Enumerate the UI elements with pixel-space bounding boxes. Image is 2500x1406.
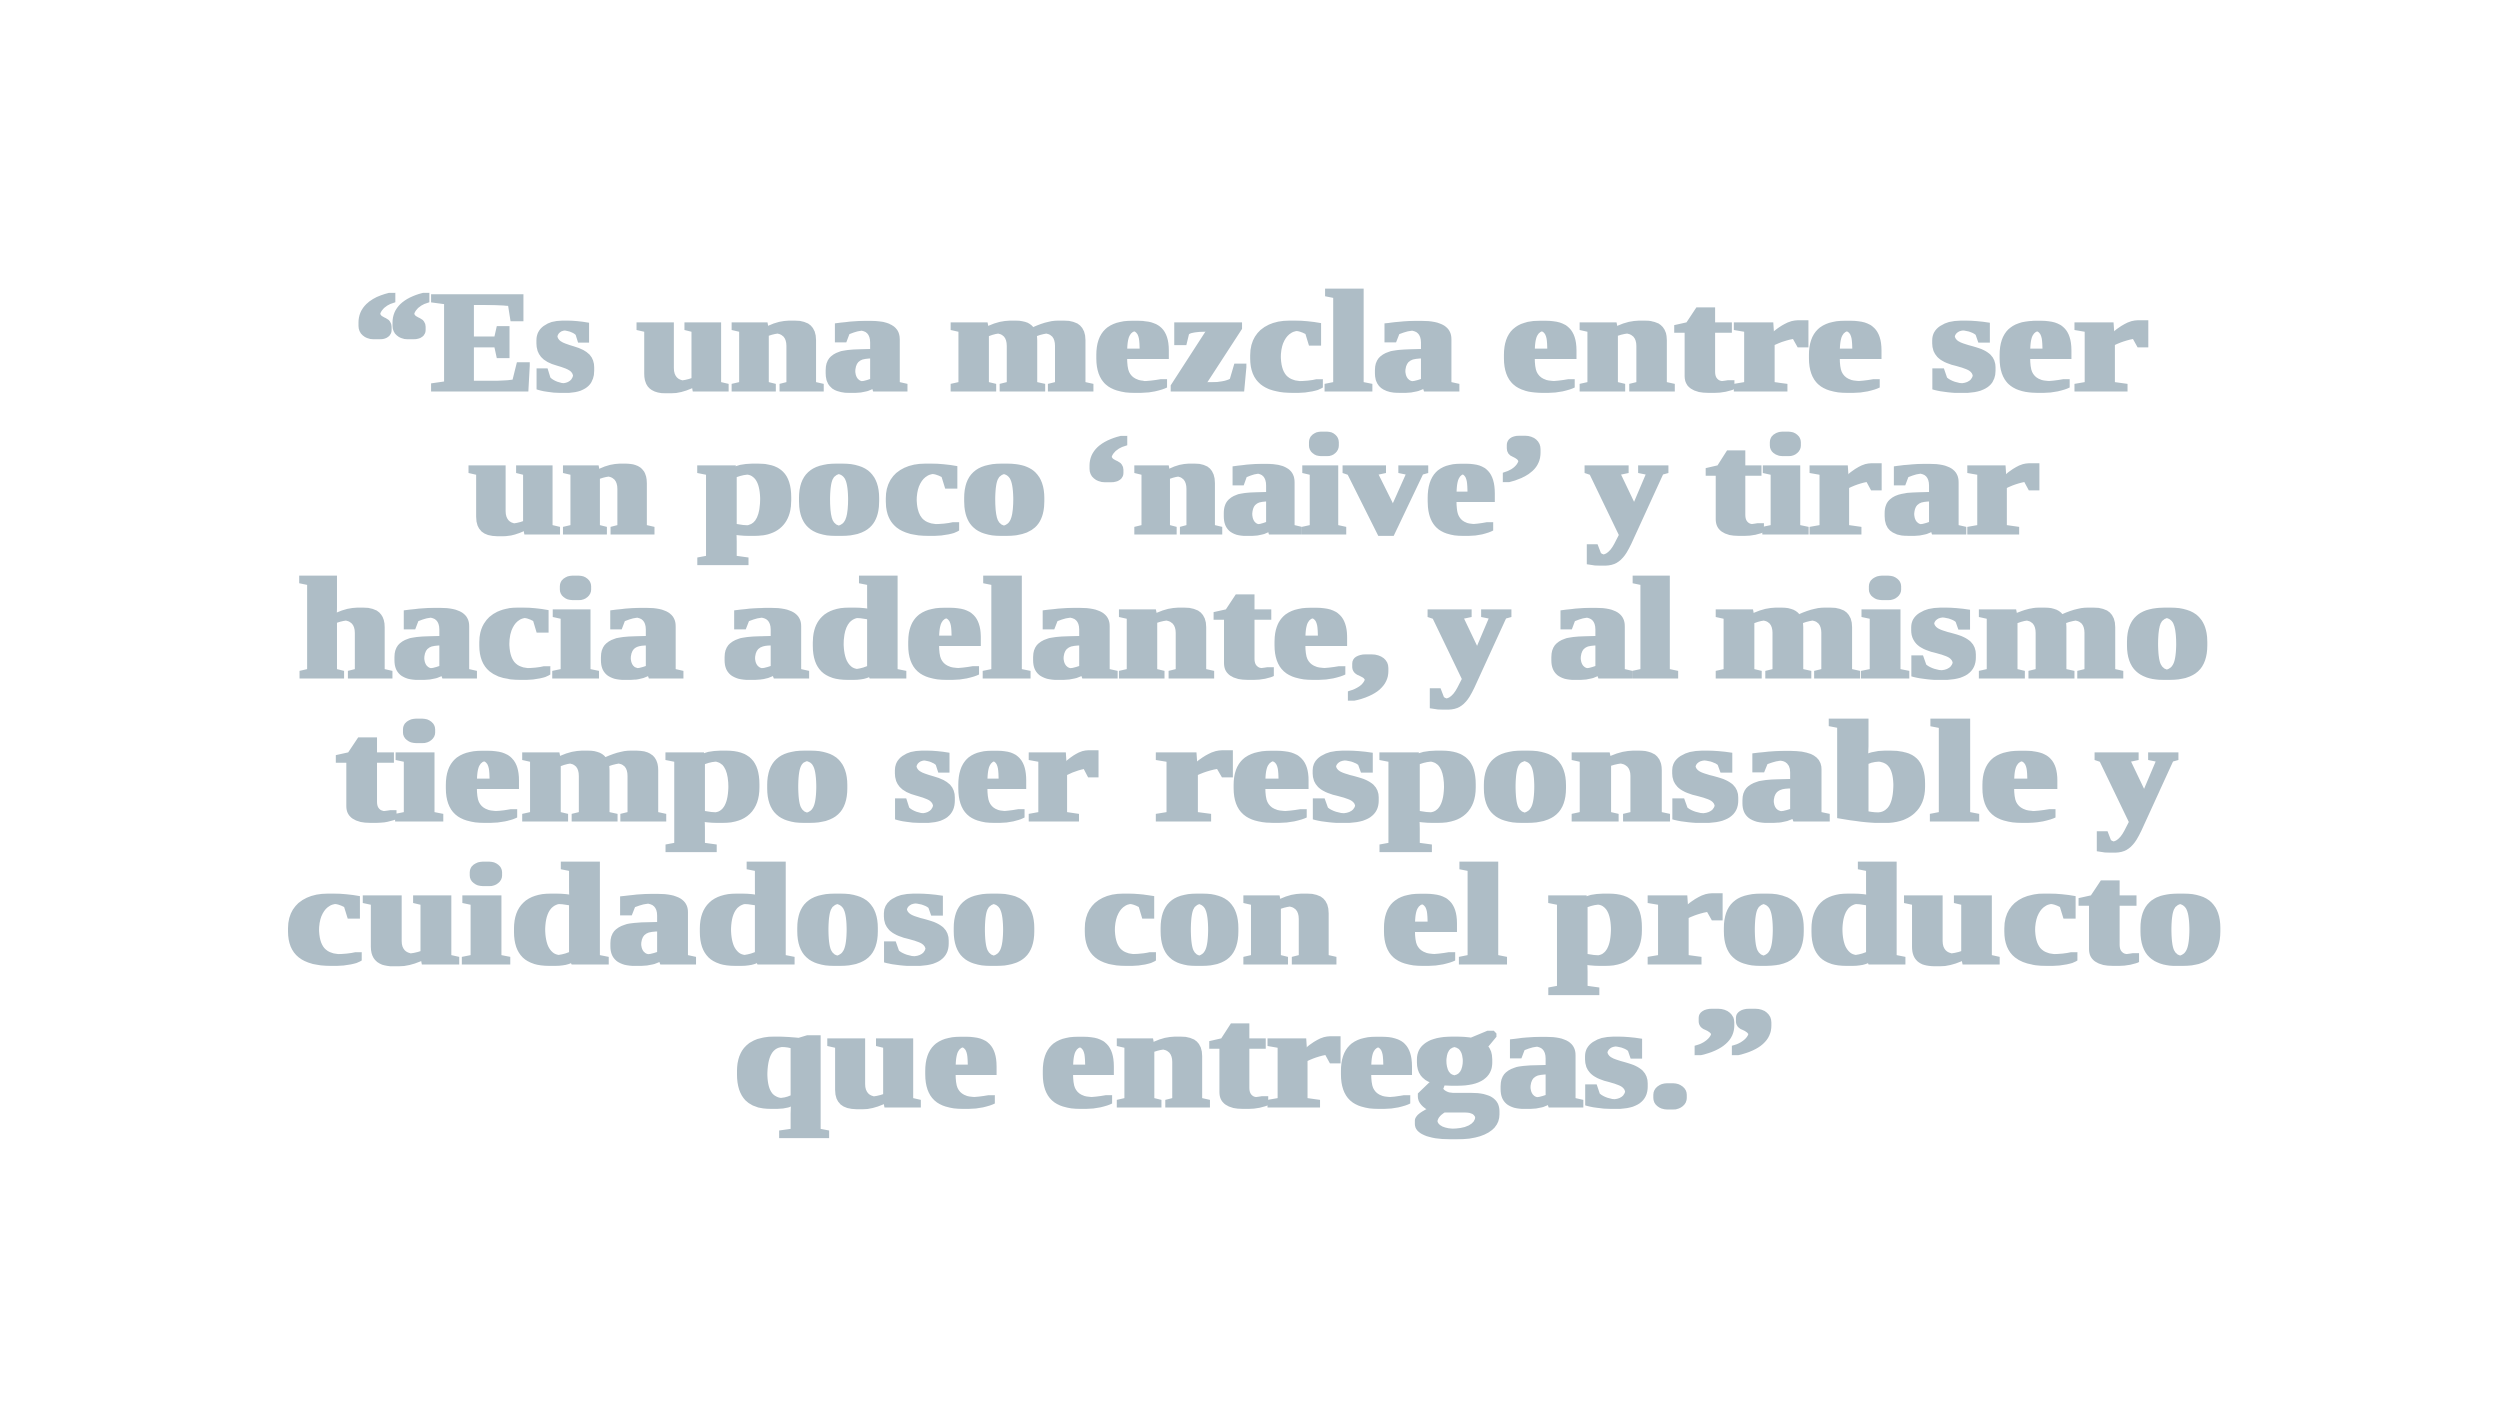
quote line 2: poco (698, 406, 1048, 565)
quote line 1: “Es (354, 263, 595, 422)
quote line 2: ‘naive’ (1080, 406, 1549, 565)
quote line 1 (354, 263, 2149, 422)
quote line 5 (285, 836, 2224, 995)
quote line 5: el (1381, 836, 1507, 995)
quote line 4: y (2096, 693, 2177, 852)
quote line 6: que (733, 979, 998, 1138)
quote line 4: responsable (1154, 693, 2059, 852)
quote line 3: y (1429, 550, 1510, 709)
quote line 2: tirar (1706, 406, 2040, 565)
quote line 6 (733, 979, 1776, 1138)
quote line 1: entre (1501, 263, 1883, 422)
quote line 1: una (637, 263, 907, 422)
quote line 3: adelante, (722, 550, 1392, 709)
quote line 2: un (469, 406, 654, 565)
quote line 4 (336, 693, 2177, 852)
quote line 2: y (1586, 406, 1667, 565)
quote line 5: con (1082, 836, 1336, 995)
quote line 6: entregas.” (1040, 979, 1776, 1138)
quote line 4: ser (893, 693, 1099, 852)
quote line 5: cuidadoso (285, 836, 1038, 995)
quote line 2 (469, 406, 2040, 565)
quote line 4: tiempo (336, 693, 851, 852)
quote line 3: al (1549, 550, 1678, 709)
quote line 5: producto (1549, 836, 2224, 995)
quote line 1: ser (1930, 263, 2149, 422)
quote line 3: hacia (298, 550, 683, 709)
quote line 3 (298, 550, 2211, 709)
quote line 3: mismo (1714, 550, 2211, 709)
quote line 1: mezcla (949, 263, 1459, 422)
quote text block (285, 263, 2224, 1138)
